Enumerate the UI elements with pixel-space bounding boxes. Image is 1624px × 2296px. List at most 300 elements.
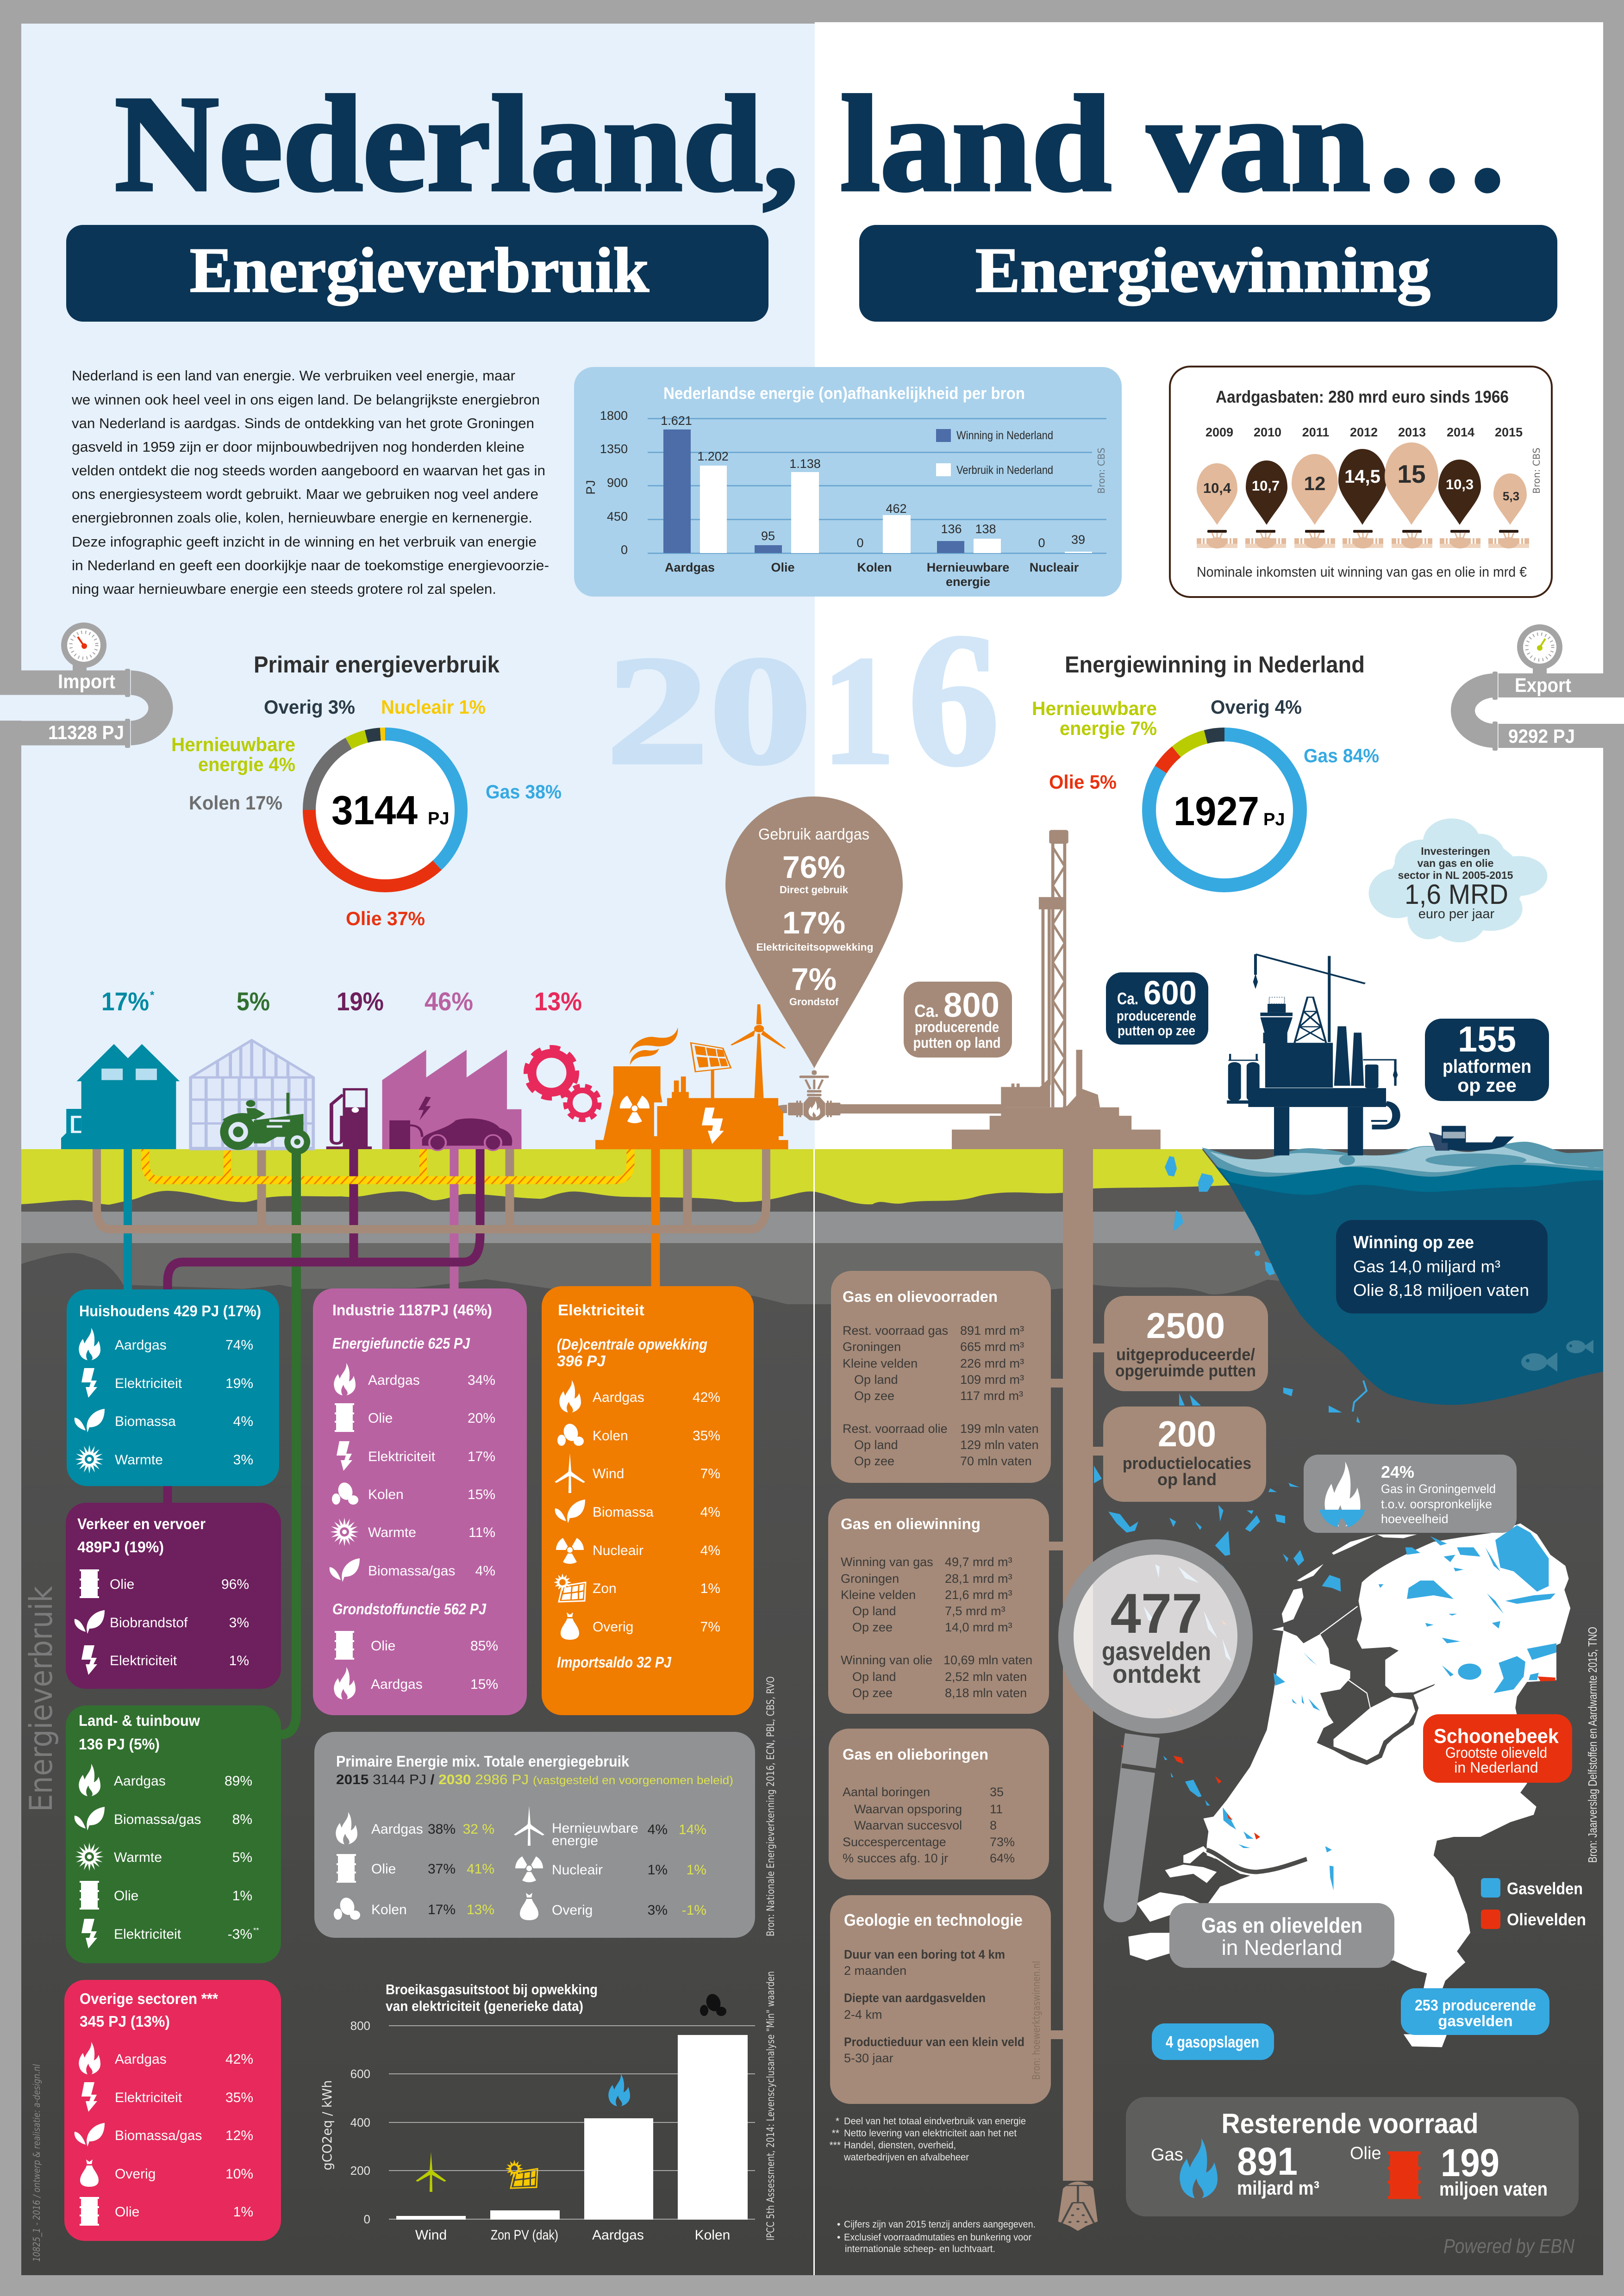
panel: industrie: Aardgas	[371, 1677, 423, 1692]
map: gas en olievelden in Nederland	[1108, 1483, 1570, 2047]
callout: schoonebeek: Schoonebeek	[1434, 1725, 1559, 1748]
panel: overige sectoren: 42%	[225, 2052, 253, 2067]
legend: gasvelden en olievelden	[1481, 1878, 1586, 1929]
big year 2016: 6	[908, 594, 999, 805]
panel: industrie: Olie	[371, 1638, 395, 1654]
panel: primaire energie mix: 2015 3144 PJ / 2030 2986 PJ (vastgesteld en voorgenomen beleid)	[336, 1772, 733, 1787]
panel: gas en oliewinning: 10,69 mln vaten	[943, 1653, 1032, 1667]
panel: elektriciteit: Nucleair	[593, 1543, 643, 1558]
chart: broeikasgasuitstoot: 800	[350, 2019, 370, 2033]
callout: 200 productielocaties: 200	[1158, 1413, 1216, 1454]
panel: primaire energie mix: Hernieuwbare	[552, 1821, 638, 1836]
panel: industrie: Aardgas	[368, 1373, 420, 1388]
callout: gebruik aardgas drop: Gebruik aardgas	[758, 826, 869, 843]
chart: broeikasgasuitstoot	[319, 1981, 755, 2243]
chart: broeikasgasuitstoot: Broeikasgasuitstoot bij opwekking	[386, 1981, 598, 1997]
panel: bar chart energie afhankelijkheid: Nucleair	[1030, 560, 1079, 574]
callout: gebruik aardgas drop: 7%	[791, 962, 837, 997]
donut: primair energieverbruik: PJ	[428, 809, 449, 828]
panel: geologie en technologie: 2-4 km	[844, 2008, 882, 2022]
panel: gas en olievoorraden: 665 mrd m³	[960, 1340, 1024, 1354]
panel: gas en olieboringen: Gas en olieboringen	[843, 1746, 988, 1763]
intro text block: Nederland is een land van energie. We verbruiken veel energie, maar	[72, 367, 515, 384]
source note: nationale energieverkenning: Bron: Nationale Energieverkenning 2016, ECN, PBL, CBS, RVO	[765, 1676, 777, 1936]
callout: 200 productielocaties: op land	[1157, 1470, 1217, 1489]
panel: bar chart energie afhankelijkheid: 95	[761, 529, 775, 543]
panel: overige sectoren: Overig	[115, 2166, 156, 2182]
panel: verkeer en vervoer: 1%	[229, 1653, 249, 1668]
callout: gebruik aardgas drop: 17%	[782, 905, 845, 940]
panel: verkeer en vervoer: 96%	[221, 1577, 249, 1592]
panel: gas en oliewinning: Op land	[852, 1604, 896, 1618]
donut: energiewinning in Nederland: Gas 84%	[1304, 745, 1379, 766]
panel: aardgasbaten: 2009	[1206, 425, 1233, 439]
chart: broeikasgasuitstoot: Zon PV (dak)	[491, 2228, 558, 2243]
chart: broeikasgasuitstoot: van elektriciteit (generieke data)	[386, 1998, 583, 2014]
panel: gas en oliewinning: Op zee	[852, 1620, 893, 1634]
panel: bar chart energie afhankelijkheid: 1.621	[661, 414, 692, 428]
panel: bar chart energie afhankelijkheid: 462	[886, 502, 907, 516]
panel: industrie: Industrie 1187PJ (46%)	[332, 1301, 492, 1319]
panel: geologie en technologie: Bron: hoewerktgaswinnen.nl	[1031, 1961, 1043, 2080]
panel: verkeer en vervoer	[66, 1503, 281, 1689]
panel: gas en oliewinning: 49,7 mrd m³	[945, 1555, 1012, 1569]
panel: overige sectoren: 35%	[225, 2090, 253, 2105]
callout: 2500 putten	[1104, 1296, 1268, 1391]
panel: gas en oliewinning: Gas en oliewinning	[841, 1515, 981, 1532]
panel: elektriciteit: Elektriciteit	[558, 1301, 644, 1319]
panel: gas en oliewinning: 2,52 mln vaten	[945, 1670, 1027, 1684]
donut: energiewinning in Nederland: PJ	[1263, 810, 1285, 829]
panel: primaire energie mix: 1%	[648, 1862, 668, 1878]
callout: 200 productielocaties	[1103, 1406, 1266, 1502]
callout: ca. 800 putten op land	[904, 982, 1012, 1058]
banner: Energieverbruik	[66, 225, 768, 322]
panel: gas en olieboringen: 8	[990, 1818, 997, 1832]
panel: elektriciteit: 42%	[693, 1390, 720, 1405]
icon: offshore platform	[1227, 954, 1398, 1155]
panel: industrie: Elektriciteit	[368, 1449, 436, 1464]
dark ground band	[21, 1185, 1243, 1212]
panel: land en tuinbouw: Warmte	[114, 1850, 162, 1865]
panel: overige sectoren: Aardgas	[115, 2052, 167, 2067]
panel: geologie en technologie: Geologie en technologie	[844, 1910, 1023, 1929]
panel: overige sectoren: 345 PJ (13%)	[80, 2013, 170, 2030]
panel: gas en olieboringen: Succespercentage	[843, 1835, 946, 1849]
panel: gas en olieboringen: % succes afg. 10 jr	[843, 1851, 948, 1865]
panel: bar chart energie afhankelijkheid: PJ	[584, 480, 598, 495]
panel: land en tuinbouw: -3%	[228, 1927, 252, 1942]
sector percentages: 5%	[237, 987, 270, 1016]
panel: elektriciteit: (De)centrale opwekking	[557, 1336, 707, 1353]
panel: gas en olievoorraden: Groningen	[843, 1340, 901, 1354]
donut: primair energieverbruik: Gas 38%	[486, 781, 562, 803]
panel: bar chart energie afhankelijkheid: 0	[856, 536, 864, 550]
panel: industrie: 11%	[468, 1525, 495, 1540]
big year 2016: 20	[606, 624, 812, 796]
general notes	[837, 2219, 1036, 2254]
label: gas en olievelden in Nederland: Gas en olievelden	[1201, 1913, 1362, 1937]
panel: gas en olievoorraden: Rest. voorraad gas	[843, 1324, 948, 1338]
title: land van	[840, 68, 1370, 220]
panel: gas en olievoorraden: 226 mrd m³	[960, 1356, 1024, 1370]
donut: primair energieverbruik: 3144	[331, 787, 418, 833]
panel: bar chart energie afhankelijkheid: Kolen	[857, 560, 892, 574]
connectors from well pipe	[1049, 1344, 1106, 2039]
gray ground band	[21, 1212, 1262, 1243]
panel: overige sectoren: Elektriciteit	[115, 2090, 182, 2105]
panel: aardgasbaten: 2015	[1495, 425, 1523, 439]
footnotes: Deel van het totaal eindverbruik van energie	[844, 2116, 1026, 2127]
donut: energiewinning in Nederland: 1927	[1174, 788, 1259, 834]
panel: elektriciteit: Biomassa	[593, 1505, 654, 1520]
panel: industrie: Grondstoffunctie 562 PJ	[332, 1600, 487, 1618]
bottom frame strip	[0, 2275, 1624, 2296]
panel: gas en oliewinning: Groningen	[841, 1572, 899, 1586]
panel: primaire energie mix: 38%	[428, 1822, 456, 1837]
panel: aardgasbaten: 15	[1397, 460, 1426, 488]
panel: overige sectoren: 10%	[225, 2166, 253, 2182]
panel: elektriciteit: Wind	[593, 1466, 624, 1481]
panel: huishoudens: 4%	[233, 1414, 253, 1429]
export pipe: 9292 PJ	[1508, 725, 1575, 747]
panel: bar chart energie afhankelijkheid: energie	[946, 575, 990, 589]
panel: primaire energie mix: 41%	[467, 1861, 494, 1877]
panel: elektriciteit	[542, 1286, 754, 1715]
big year 2016: 1	[822, 624, 895, 796]
panel: geologie en technologie: Duur van een boring tot 4 km	[844, 1948, 1005, 1961]
panel: bar chart energie afhankelijkheid: Nederlandse energie (on)afhankelijkheid per bron	[663, 384, 1025, 403]
panel: elektriciteit: 7%	[700, 1619, 720, 1635]
panel: gas en olievoorraden: 70 mln vaten	[960, 1454, 1032, 1468]
donut: primair energieverbruik: Overig 3%	[264, 696, 355, 718]
panel: industrie: 85%	[470, 1638, 498, 1654]
donut: primair energieverbruik	[171, 652, 562, 929]
panel: elektriciteit: Importsaldo 32 PJ	[557, 1654, 672, 1671]
panel: primaire energie mix	[314, 1732, 755, 1938]
callout: ca. 600 putten op zee: producerende	[1117, 1008, 1196, 1024]
intro text block: ons energiesysteem wordt gebruikt. Maar we gebruiken nog veel andere	[72, 486, 538, 502]
panel: overige sectoren: Biomassa/gas	[115, 2128, 202, 2143]
panel: gas en oliewinning: Kleine velden	[841, 1588, 916, 1602]
panel: elektriciteit: 1%	[700, 1581, 720, 1596]
panel: industrie: 20%	[468, 1411, 495, 1426]
panel: land en tuinbouw: Aardgas	[114, 1773, 166, 1789]
footnotes: Handel, diensten, overheid,	[844, 2140, 956, 2151]
general notes: internationale scheep- en luchtvaart.	[845, 2244, 995, 2254]
panel: huishoudens	[67, 1289, 279, 1486]
source note: jaarverslag: Bron: Jaarverslag Delfstoffen en Aardwarmte 2015, TNO	[1586, 1627, 1599, 1863]
legend: gasvelden en olievelden: Olievelden	[1507, 1910, 1586, 1929]
callout: winning op zee: Winning op zee	[1353, 1233, 1474, 1252]
panel: geologie en technologie: Productieduur van een klein veld	[844, 2035, 1024, 2049]
panel: aardgasbaten: Aardgasbaten: 280 mrd euro sinds 1966	[1216, 387, 1509, 406]
panel: gas en olievoorraden: 129 mln vaten	[960, 1438, 1039, 1452]
chart: broeikasgasuitstoot: Wind	[415, 2228, 447, 2243]
intro text block: velden ontdekt die nog steeds worden aangeboord en waarvan het gas in	[72, 462, 545, 479]
panel: aardgasbaten: 2012	[1350, 425, 1378, 439]
chart: broeikasgasuitstoot: 0	[364, 2212, 370, 2226]
general notes: Exclusief voorraadmutaties en bunkering voor	[844, 2232, 1031, 2243]
panel: gas en olieboringen: 73%	[990, 1835, 1015, 1849]
panel: aardgasbaten: Bron: CBS	[1531, 448, 1542, 494]
panel: aardgasbaten: 10,7	[1252, 478, 1280, 494]
panel: gas en olievoorraden: 109 mrd m³	[960, 1373, 1024, 1387]
panel: gas en oliewinning: Op zee	[852, 1686, 893, 1700]
banner: Energieverbruik: Energieverbruik	[190, 235, 649, 305]
white centre line	[813, 1149, 815, 2275]
footnotes: Netto levering van elektriciteit aan het net	[844, 2128, 1017, 2139]
callout: ca. 800 putten op land: Ca.	[914, 1002, 939, 1021]
icon: power plant, solar panel and wind turbine	[595, 1004, 788, 1149]
banner: Energiewinning	[859, 225, 1557, 322]
panel: huishoudens: Biomassa	[115, 1414, 176, 1429]
callout: 4 gasopslagen: 4 gasopslagen	[1166, 2033, 1259, 2051]
panel: primaire energie mix: Olie	[371, 1861, 396, 1877]
panel: land en tuinbouw: **	[253, 1927, 259, 1935]
panel: bar chart energie afhankelijkheid: 900	[607, 476, 628, 490]
panel: land en tuinbouw: 5%	[232, 1850, 252, 1865]
panel: bar chart energie afhankelijkheid: 138	[975, 522, 996, 536]
callout: 24% Groningenveld: Gas in Groningenveld	[1381, 1482, 1496, 1496]
panel: primaire energie mix: 3%	[648, 1903, 668, 1918]
callout: 155 platformen: platformen	[1443, 1056, 1531, 1077]
donut: primair energieverbruik: Olie 37%	[346, 908, 425, 929]
panel: resterende voorraad: 199	[1441, 2141, 1499, 2184]
callout: investeringen cloud	[1368, 818, 1547, 942]
panel: aardgasbaten: 2013	[1398, 425, 1426, 439]
underground energy pipes	[97, 1109, 787, 1735]
callout: 2500 putten: uitgeproduceerde/	[1116, 1345, 1255, 1364]
callout: 253 producerende gasvelden: 253 producerende	[1415, 1997, 1536, 2014]
panel: elektriciteit: Overig	[593, 1619, 633, 1635]
icon: fish	[1521, 1340, 1593, 1372]
callout: ca. 600 putten op zee	[1106, 972, 1208, 1045]
panel: overige sectoren: 1%	[233, 2204, 253, 2220]
title: Nederland,	[115, 68, 799, 220]
panel: overige sectoren	[64, 1980, 281, 2241]
magnifier: 477 gasvelden ontdekt: ontdekt	[1112, 1659, 1200, 1688]
footnotes: **	[832, 2128, 839, 2139]
panel: resterende voorraad: miljard m³	[1237, 2177, 1319, 2199]
callout: 24% Groningenveld: t.o.v. oorspronkelijke	[1381, 1497, 1492, 1511]
callout: 24% Groningenveld: 24%	[1381, 1462, 1414, 1481]
panel: gas en olievoorraden: Op land	[854, 1373, 898, 1387]
intro text block: we winnen ook heel veel in ons eigen land. De belangrijkste energiebron	[71, 392, 540, 408]
rock layer	[21, 1203, 1389, 1304]
panel: primaire energie mix: Nucleair	[552, 1862, 603, 1878]
panel: verkeer en vervoer: Verkeer en vervoer	[77, 1515, 206, 1532]
panel: gas en olieboringen: Aantal boringen	[843, 1785, 930, 1799]
callout: ca. 600 putten op zee: putten op zee	[1118, 1023, 1195, 1039]
panel: industrie: Energiefunctie 625 PJ	[332, 1335, 470, 1352]
intro text block: in Nederland en geeft een doorkijkje naar de toekomstige energievoorzie-	[72, 557, 549, 573]
icon: house	[61, 1044, 180, 1149]
panel: gas en olievoorraden: 199 mln vaten	[960, 1422, 1039, 1436]
export pipe	[1463, 672, 1624, 751]
panel: industrie: 34%	[468, 1373, 495, 1388]
panel: verkeer en vervoer: Biobrandstof	[110, 1615, 188, 1630]
panel: land en tuinbouw: 1%	[232, 1888, 252, 1904]
land rig and main well pipe	[839, 830, 1161, 2181]
panel: bar chart energie afhankelijkheid: Winning in Nederland	[956, 429, 1053, 442]
panel: bar chart energie afhankelijkheid: 450	[607, 510, 628, 523]
intro text block: Deze infographic geeft inzicht in de winning en het verbruik van energie	[72, 534, 537, 550]
label: gas en olievelden in Nederland: in Nederland	[1222, 1935, 1342, 1960]
panel: aardgasbaten: 12	[1304, 473, 1325, 494]
panel: huishoudens: Elektriciteit	[115, 1376, 182, 1391]
chart: broeikasgasuitstoot: gCO2eq / kWh	[319, 2080, 335, 2171]
donut: energiewinning in Nederland: energie 7%	[1060, 717, 1157, 739]
label: gas en olievelden in Nederland	[1169, 1903, 1394, 1968]
panel: overige sectoren: Overige sectoren ***	[80, 1990, 218, 2007]
panel: verkeer en vervoer: 489PJ (19%)	[77, 1538, 164, 1556]
panel: resterende voorraad: miljoen vaten	[1439, 2178, 1548, 2200]
panel: primaire energie mix: -1%	[682, 1903, 706, 1918]
callout: winning op zee	[1336, 1220, 1548, 1313]
legend: gasvelden en olievelden: Gasvelden	[1507, 1879, 1583, 1898]
icon: blue specks in ground	[1165, 1156, 1275, 1276]
callout: 253 producerende gasvelden	[1401, 1988, 1549, 2035]
callout: schoonebeek: Grootste olieveld	[1445, 1744, 1547, 1761]
callout: 2500 putten: opgeruimde putten	[1115, 1361, 1256, 1380]
general notes: •	[837, 2219, 840, 2230]
sky panel: energieverbruik	[21, 24, 815, 1153]
footnotes	[829, 2116, 1026, 2163]
sector percentages: *	[150, 989, 155, 1002]
callout: ca. 800 putten op land: producerende	[915, 1019, 999, 1035]
callout: investeringen cloud: sector in NL 2005-2015	[1398, 869, 1513, 881]
panel: primaire energie mix: 17%	[428, 1902, 456, 1917]
callout: ca. 800 putten op land: 800	[943, 986, 999, 1024]
magnifier: 477 gasvelden ontdekt: 477	[1110, 1582, 1203, 1645]
panel: gas en olievoorraden: 891 mrd m³	[960, 1324, 1024, 1338]
panel: huishoudens: Warmte	[115, 1452, 163, 1468]
chart: broeikasgasuitstoot: Aardgas	[592, 2228, 644, 2243]
callout: 155 platformen: op zee	[1457, 1075, 1517, 1096]
panel: gas en oliewinning: Winning van gas	[841, 1555, 933, 1569]
donut: energiewinning in Nederland: Olie 5%	[1049, 771, 1117, 793]
panel: gas en oliewinning: Op land	[852, 1670, 896, 1684]
panel: gas en olievoorraden: Rest. voorraad olie	[843, 1422, 948, 1436]
magnifier: 477 gasvelden ontdekt: gasvelden	[1102, 1636, 1211, 1666]
panel: gas en oliewinning: 7,5 mrd m³	[945, 1604, 1006, 1618]
icon: greenhouse	[191, 1040, 313, 1149]
panel: industrie: Olie	[368, 1411, 393, 1426]
panel: primaire energie mix: 13%	[467, 1902, 494, 1917]
panel: primaire energie mix: 32 %	[463, 1822, 494, 1837]
panel: verkeer en vervoer: Olie	[110, 1577, 134, 1592]
panel: aardgasbaten: Nominale inkomsten uit winning van gas en olie in mrd €	[1197, 564, 1527, 580]
panel: aardgasbaten: 2011	[1302, 425, 1329, 439]
underground base	[21, 1149, 1603, 2275]
panel: geologie en technologie: Diepte van aardgasvelden	[844, 1991, 986, 2005]
panel: gas en oliewinning: 14,0 mrd m³	[945, 1620, 1012, 1634]
intro text block: ning waar hernieuwbare energie een steeds grotere rol zal spelen.	[72, 581, 496, 597]
callout: winning op zee: Gas 14,0 miljard m³	[1353, 1257, 1500, 1276]
panel: aardgasbaten	[1170, 367, 1552, 597]
import pipe: Import	[58, 671, 115, 693]
import pipe	[0, 669, 161, 748]
green topsoil	[21, 1149, 1230, 1205]
panel: aardgasbaten: 10,3	[1446, 476, 1474, 492]
panel: gas en olievoorraden: Gas en olievoorraden	[843, 1288, 998, 1305]
callout: 24% Groningenveld	[1304, 1455, 1517, 1533]
panel: resterende voorraad: 891	[1237, 2140, 1298, 2183]
icon: drill bit	[1058, 2182, 1098, 2231]
panel: elektriciteit: 396 PJ	[557, 1352, 606, 1369]
callout: gebruik aardgas drop: Grondstof	[789, 996, 839, 1008]
panel: resterende voorraad: Olie	[1350, 2144, 1381, 2163]
panel: industrie: 15%	[468, 1487, 495, 1502]
sector percentages: 17%	[101, 987, 149, 1016]
panel: gas en olieboringen: 11	[990, 1802, 1003, 1816]
panel: primaire energie mix: Primaire Energie mix. Totale energiegebruik	[336, 1753, 630, 1770]
donut: primair energieverbruik: Hernieuwbare	[171, 734, 295, 755]
intro text block: energiebronnen zoals olie, kolen, hernieuwbare energie en kernenergie.	[72, 510, 532, 526]
sky panel: energiewinning	[815, 22, 1603, 1153]
panel: elektriciteit: 7%	[700, 1466, 720, 1481]
offshore field fragments north of the map	[1094, 1381, 1367, 1483]
panel: industrie: 15%	[470, 1677, 498, 1692]
panel: gas en olieboringen	[829, 1729, 1049, 1879]
panel: gas en olieboringen: 64%	[990, 1851, 1015, 1865]
panel: bar chart energie afhankelijkheid: 0	[621, 543, 628, 557]
banner: Energiewinning: Energiewinning	[975, 235, 1430, 305]
callout: investeringen cloud: 1,6 MRD	[1405, 879, 1508, 910]
panel: bar chart energie afhankelijkheid: 1800	[600, 409, 628, 423]
general notes: Cijfers zijn van 2015 tenzij anders aangegeven.	[844, 2219, 1036, 2230]
callout: 2500 putten: 2500	[1146, 1305, 1225, 1346]
chart: broeikasgasuitstoot: 200	[350, 2164, 370, 2178]
icon: gears	[527, 1048, 599, 1120]
panel: elektriciteit: Kolen	[593, 1428, 628, 1444]
import pipe: 11328 PJ	[48, 722, 124, 743]
donut: primair energieverbruik: Kolen 17%	[189, 792, 282, 814]
general notes: •	[837, 2232, 840, 2243]
donut: energiewinning in Nederland: Energiewinning in Nederland	[1065, 652, 1365, 678]
sector percentages: 13%	[534, 987, 582, 1016]
icon: ship	[1429, 1126, 1514, 1151]
powered by EBN: Powered by EBN	[1443, 2235, 1574, 2258]
panel: primaire energie mix: energie	[552, 1833, 598, 1848]
panel: aardgasbaten: 2010	[1254, 425, 1281, 439]
panel: industrie: Warmte	[368, 1525, 416, 1540]
panel: gas en olievoorraden	[831, 1271, 1051, 1483]
panel: huishoudens: 3%	[233, 1452, 253, 1468]
panel: industrie: Kolen	[368, 1487, 404, 1502]
panel: resterende voorraad	[1126, 2097, 1579, 2216]
callout: 155 platformen: 155	[1458, 1019, 1516, 1059]
footnotes: waterbedrijven en afvalbeheer	[843, 2152, 969, 2163]
panel: gas en olieboringen: Waarvan opsporing	[854, 1802, 962, 1816]
icon: gas pump	[326, 1088, 372, 1149]
panel: aardgasbaten: 2014	[1447, 425, 1474, 439]
donut: energiewinning in Nederland	[1032, 652, 1379, 885]
donut: primair energieverbruik: Nucleair 1%	[381, 696, 486, 718]
credit line: 10825_1 - 2016 / ontwerp & realisatie: a-design.nl	[31, 2064, 42, 2262]
panel: elektriciteit: Aardgas	[593, 1390, 644, 1405]
panel: land en tuinbouw: Olie	[114, 1888, 138, 1904]
panel: resterende voorraad: Gas	[1151, 2145, 1183, 2165]
panel: bar chart energie afhankelijkheid	[574, 367, 1122, 597]
callout: gebruik aardgas drop	[725, 796, 903, 1068]
panel: gas en oliewinning: 28,1 mrd m³	[945, 1572, 1012, 1586]
callout: 24% Groningenveld: hoeveelheid	[1381, 1512, 1449, 1526]
callout: winning op zee: Olie 8,18 miljoen vaten	[1353, 1281, 1529, 1300]
panel: huishoudens: 74%	[225, 1338, 253, 1353]
panel: land en tuinbouw: Land- & tuinbouw	[79, 1712, 200, 1729]
